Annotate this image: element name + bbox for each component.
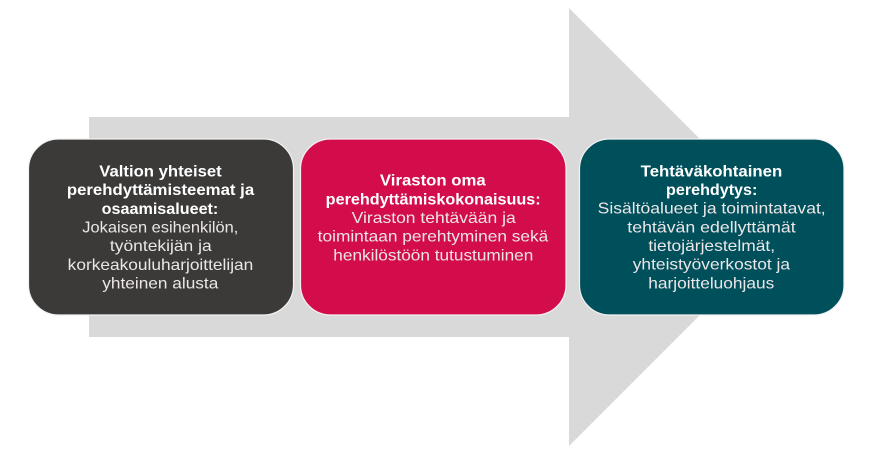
panel: tehtäväkohtainen: perehdytys: — [666, 182, 757, 199]
panel: valtion yhteiset: perehdyttämisteemat ja — [67, 182, 254, 199]
panel: viraston oma: perehdyttämiskokonaisuus: — [326, 191, 541, 208]
panel: tehtäväkohtainen: tietojärjestelmät, — [648, 238, 775, 255]
arrow background — [89, 8, 788, 446]
panel: viraston oma: Viraston oma — [380, 173, 486, 190]
panel: valtion yhteiset: Jokaisen esihenkilön, — [82, 220, 238, 236]
panel: tehtäväkohtainen: harjoitteluohjaus — [648, 275, 774, 292]
panel: viraston oma: Viraston tehtävään ja — [352, 210, 516, 227]
panel: valtion yhteiset: osaamisalueet: — [102, 201, 218, 218]
panel: tehtäväkohtainen: Sisältöalueet ja toimintatavat, — [598, 201, 826, 218]
panel: valtion yhteiset: yhteinen alusta — [102, 276, 218, 292]
panel: tehtäväkohtainen: tehtävän edellyttämät — [627, 219, 796, 236]
panel: viraston oma: henkilöstöön tutustuminen — [333, 247, 533, 264]
panel: valtion yhteiset — [28, 139, 294, 315]
panel: viraston oma — [300, 139, 566, 315]
panel: tehtäväkohtainen: yhteistyöverkostot ja — [633, 257, 790, 274]
panel: valtion yhteiset: korkeakouluharjoittelijan — [68, 257, 253, 274]
panel: tehtäväkohtainen: Tehtäväkohtainen — [641, 163, 782, 180]
panel: valtion yhteiset: työntekijän ja — [110, 238, 212, 255]
panel: tehtäväkohtainen — [580, 139, 844, 315]
panel: valtion yhteiset: Valtion yhteiset — [99, 164, 222, 180]
panel: viraston oma: toimintaan perehtyminen sekä — [318, 229, 548, 246]
